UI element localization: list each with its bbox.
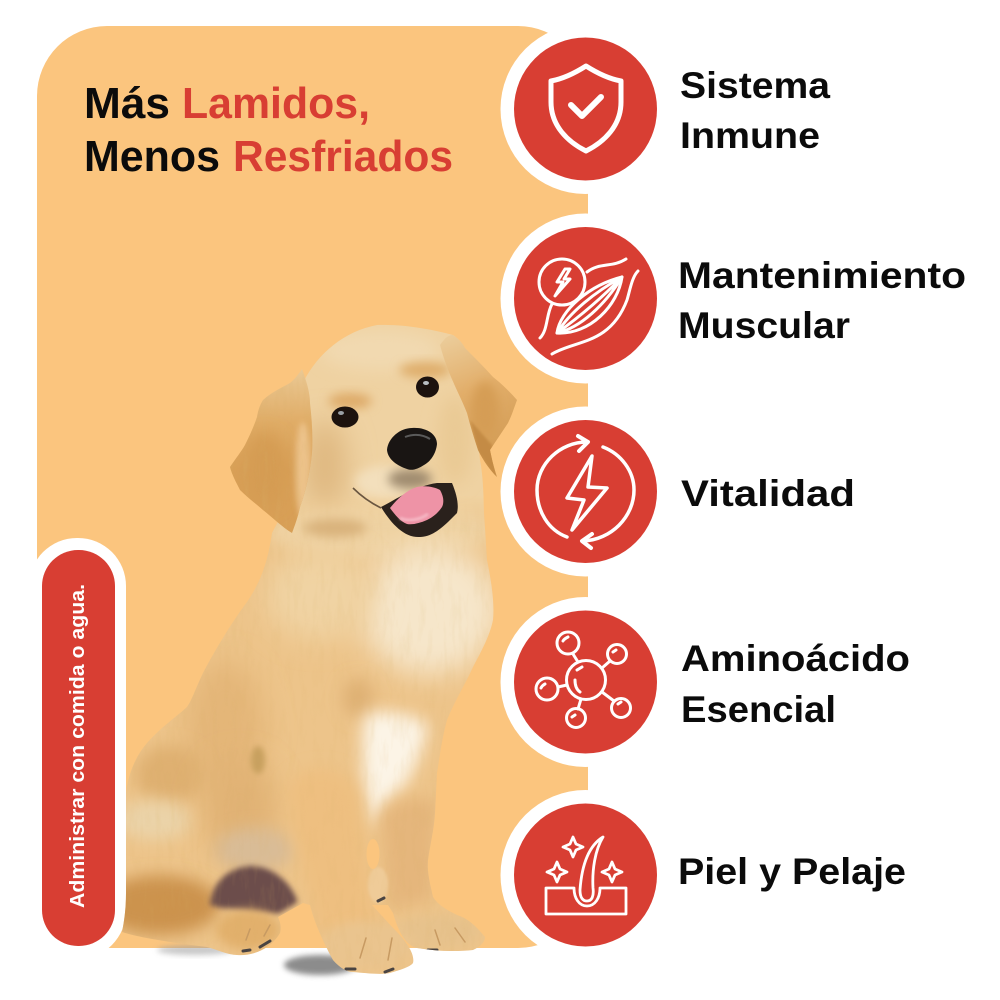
benefit: mantenimiento muscular: Muscular bbox=[678, 305, 850, 346]
benefit: vitalidad: Vitalidad bbox=[681, 473, 855, 514]
icon: hair follicle with sparkles bbox=[546, 837, 626, 914]
toes and claws bbox=[243, 898, 465, 972]
dog photo illustration bbox=[100, 320, 525, 980]
benefit: mantenimiento muscular bbox=[500, 214, 966, 384]
benefit: sistema inmune bbox=[500, 24, 830, 194]
left ear bbox=[230, 370, 312, 533]
dog face bbox=[332, 376, 458, 537]
benefit: piel y pelaje: Piel y Pelaje bbox=[678, 851, 906, 892]
side pill: administration note: Administrar con comida o agua. bbox=[67, 584, 89, 908]
mouth bbox=[353, 483, 458, 537]
icon: muscle with bolt bbox=[539, 259, 638, 354]
background panel bbox=[37, 26, 588, 948]
fur texture bbox=[256, 574, 482, 902]
gap between front legs bbox=[366, 839, 380, 869]
benefit: sistema inmune: Sistema bbox=[680, 65, 830, 106]
benefit: aminoacido esencial: Esencial bbox=[681, 689, 836, 730]
nose bbox=[387, 428, 437, 470]
icon: shield with check bbox=[551, 66, 621, 151]
benefit: aminoacido esencial bbox=[500, 597, 910, 767]
benefit: mantenimiento muscular: Mantenimiento bbox=[678, 255, 966, 296]
side pill: administration note bbox=[29, 538, 126, 959]
right ear bbox=[440, 335, 517, 477]
benefit: piel y pelaje bbox=[500, 790, 906, 960]
dog body bbox=[122, 505, 494, 974]
benefit: sistema inmune: Inmune bbox=[680, 115, 820, 156]
title: Resfriados bbox=[233, 132, 453, 181]
paw shadows bbox=[157, 945, 356, 975]
neck shadow under cheek bbox=[303, 519, 367, 537]
icon: refresh arrows with bolt bbox=[537, 436, 634, 548]
title: Menos bbox=[84, 132, 220, 181]
title: Lamidos, bbox=[182, 79, 370, 128]
benefit: aminoacido esencial: Aminoácido bbox=[681, 638, 910, 679]
benefit: vitalidad bbox=[500, 406, 855, 576]
dog head bbox=[300, 324, 484, 514]
eyes bbox=[332, 376, 439, 428]
title bbox=[84, 79, 453, 181]
title: Más bbox=[84, 79, 170, 128]
icon: molecule bbox=[536, 632, 630, 728]
